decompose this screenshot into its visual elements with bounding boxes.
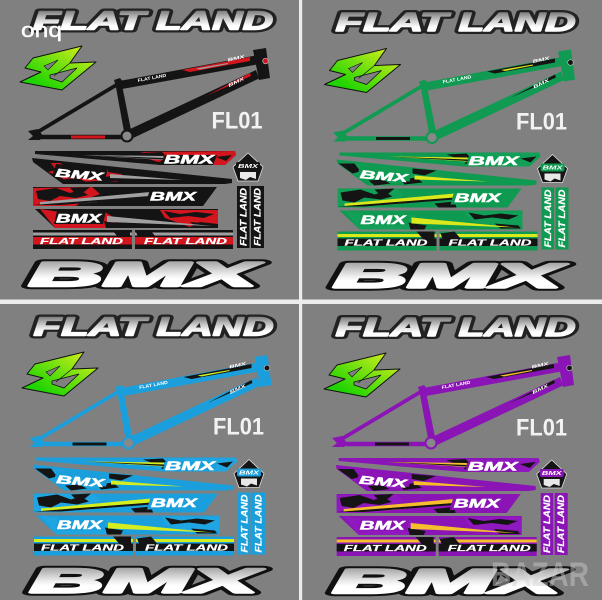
decal strip 6: FLAT LAND: [448, 543, 531, 553]
decal strip 3: [33, 187, 217, 206]
title: FLAT LAND: LAND: [458, 312, 576, 342]
decal strip 6: [135, 230, 233, 249]
vertical strip 1: FLAT LAND: [543, 189, 553, 248]
decal strip 5: FLAT LAND: [344, 543, 427, 553]
vertical strip 2: [556, 188, 568, 250]
vertical strip 1: [238, 492, 250, 554]
decal strip 5: [338, 232, 436, 250]
frame: FLAT LAND: [139, 380, 169, 390]
big BMX: BMX: [29, 256, 264, 294]
model code: FL01: [516, 108, 567, 136]
decal set: [334, 152, 568, 295]
frame: [30, 355, 272, 448]
title: FLAT LAND: FLAT: [34, 311, 149, 341]
model code: FL01: [212, 108, 262, 134]
badge: [234, 460, 264, 488]
big BMX: [333, 563, 568, 600]
decal strip 6: FLAT LAND: [144, 236, 227, 246]
title: FLAT LAND: [336, 7, 576, 37]
frame: BMX: [229, 383, 248, 395]
title: FLAT LAND: LAND: [458, 7, 576, 37]
title: FLAT LAND: LAND: [156, 311, 274, 341]
title: FLAT LAND: FLAT: [336, 312, 451, 342]
frame: [332, 355, 574, 448]
decal set: [30, 458, 265, 600]
icon: green logo: [324, 353, 400, 397]
decal strip 1: [339, 458, 540, 474]
vertical strip 1: [542, 188, 554, 250]
decal strip 6: [440, 232, 538, 250]
frame: [28, 48, 270, 142]
panel: blue frame kit: [22, 311, 274, 600]
title: FLAT LAND: FLAT: [33, 5, 149, 35]
big BMX: BMX: [30, 562, 265, 600]
decal strip 4: [36, 516, 219, 534]
title: FLAT LAND: [33, 5, 273, 35]
decal strip 3: [34, 494, 218, 512]
frame: [333, 50, 575, 143]
decal strip 3: BMX: [454, 498, 502, 510]
title: FLAT LAND: LAND: [156, 5, 273, 35]
decal strip 2: BMX: [358, 475, 410, 491]
frame: FLAT LAND: [441, 380, 471, 390]
decal strip 3: [337, 494, 521, 513]
decal strip 4: [339, 516, 522, 535]
frame: FLAT LAND: [137, 73, 167, 83]
badge: BMX: [238, 164, 259, 170]
decal strip 1: [340, 152, 540, 168]
decal strip 1: [36, 458, 237, 473]
vertical strip 1: [541, 493, 553, 555]
decal strip 2: [33, 464, 233, 490]
decal strip 5: FLAT LAND: [40, 236, 123, 246]
vertical strip 1: FLAT LAND: [240, 494, 250, 552]
big BMX: BMX: [333, 563, 568, 600]
decal strip 1: BMX: [164, 154, 217, 166]
big BMX: [30, 562, 265, 600]
title: FLAT LAND: [34, 311, 274, 341]
vertical strip 2: FLAT LAND: [557, 189, 567, 248]
badge: [537, 460, 567, 488]
decal strip 5: [34, 536, 133, 556]
decal set: [333, 458, 568, 600]
decal strip 2: BMX: [55, 168, 106, 184]
title: FLAT LAND: FLAT: [34, 311, 149, 341]
badge: BMX: [542, 471, 563, 477]
title: FLAT LAND: FLAT: [336, 7, 451, 37]
decal strip 2: [32, 158, 232, 184]
panel: black frame kit: [20, 5, 273, 294]
panel: green frame kit: [324, 7, 576, 295]
model code: FL01: [213, 414, 264, 440]
icon: green logo: [22, 352, 98, 396]
decal strip 6: FLAT LAND: [145, 542, 228, 552]
decal strip 4: BMX: [360, 520, 407, 532]
title: FLAT LAND: FLAT: [336, 312, 451, 342]
decal strip 4: BMX: [56, 214, 103, 226]
title: FLAT LAND: LAND: [156, 311, 274, 341]
big BMX: [29, 256, 264, 294]
decal strip 6: FLAT LAND: [448, 237, 532, 247]
title: FLAT LAND: FLAT: [33, 5, 149, 35]
vertical strip 1: FLAT LAND: [542, 494, 552, 553]
icon: green logo: [324, 48, 400, 92]
big BMX: BMX: [29, 256, 264, 294]
decal strip 3: BMX: [151, 498, 199, 510]
title: FLAT LAND: LAND: [156, 5, 273, 35]
vertical strip 2: [555, 493, 568, 555]
decal strip 1: BMX: [165, 461, 218, 473]
title: FLAT LAND: FLAT: [336, 7, 451, 37]
title: FLAT LAND: LAND: [458, 7, 576, 37]
big BMX: BMX: [30, 562, 265, 600]
decal strip 3: BMX: [150, 192, 198, 204]
vertical strip 1: [237, 186, 250, 248]
frame: BMX: [227, 76, 246, 88]
decal strip 2: BMX: [56, 474, 107, 490]
watermark: onq: onq: [21, 20, 62, 42]
decal strip 5: FLAT LAND: [344, 237, 428, 247]
decal strip 2: [336, 465, 536, 491]
decal strip 4: [35, 209, 218, 228]
frame: BMX: [227, 54, 246, 62]
decal strip 2: [336, 160, 536, 186]
decal strip 3: [338, 188, 522, 208]
decal strip 5: [33, 230, 132, 249]
frame: BMX: [531, 383, 550, 395]
title: FLAT LAND: LAND: [458, 312, 576, 342]
decal strip 4: BMX: [360, 215, 408, 227]
decal strip 4: [340, 210, 522, 230]
title: FLAT LAND: [336, 312, 576, 342]
vertical strip 1: FLAT LAND: [238, 187, 248, 246]
vertical strip 2: FLAT LAND: [254, 494, 264, 552]
badge: BMX: [542, 166, 564, 172]
model code: FL01: [516, 414, 567, 442]
decal strip 1: BMX: [468, 462, 520, 474]
vertical strip 2: [252, 492, 265, 554]
big BMX: BMX: [334, 257, 568, 295]
icon: green logo: [20, 46, 96, 90]
vertical strip 2: [251, 186, 264, 248]
decal strip 2: BMX: [359, 169, 411, 185]
vertical strip 2: FLAT LAND: [252, 187, 262, 246]
decal strip 5: FLAT LAND: [41, 542, 124, 552]
badge: [233, 153, 263, 181]
big BMX: [334, 257, 568, 295]
decal strip 4: BMX: [57, 520, 104, 532]
frame: FLAT LAND: [442, 74, 472, 84]
decal strip 6: [439, 537, 537, 556]
decal strip 3: BMX: [454, 193, 503, 205]
frame: BMX: [229, 361, 248, 369]
decal strip 1: BMX: [468, 156, 521, 168]
vertical strip 2: FLAT LAND: [556, 494, 566, 553]
decal strip 5: [337, 537, 436, 556]
big BMX: BMX: [333, 563, 568, 600]
decal strip 6: [136, 536, 234, 556]
badge: BMX: [239, 470, 260, 476]
frame: BMX: [532, 77, 551, 89]
big BMX: BMX: [334, 257, 568, 295]
frame: BMX: [531, 361, 550, 369]
decal strip 1: [35, 151, 236, 166]
frame: BMX: [532, 55, 551, 64]
panel: purple frame kit: [324, 312, 576, 600]
badge: [538, 154, 568, 182]
